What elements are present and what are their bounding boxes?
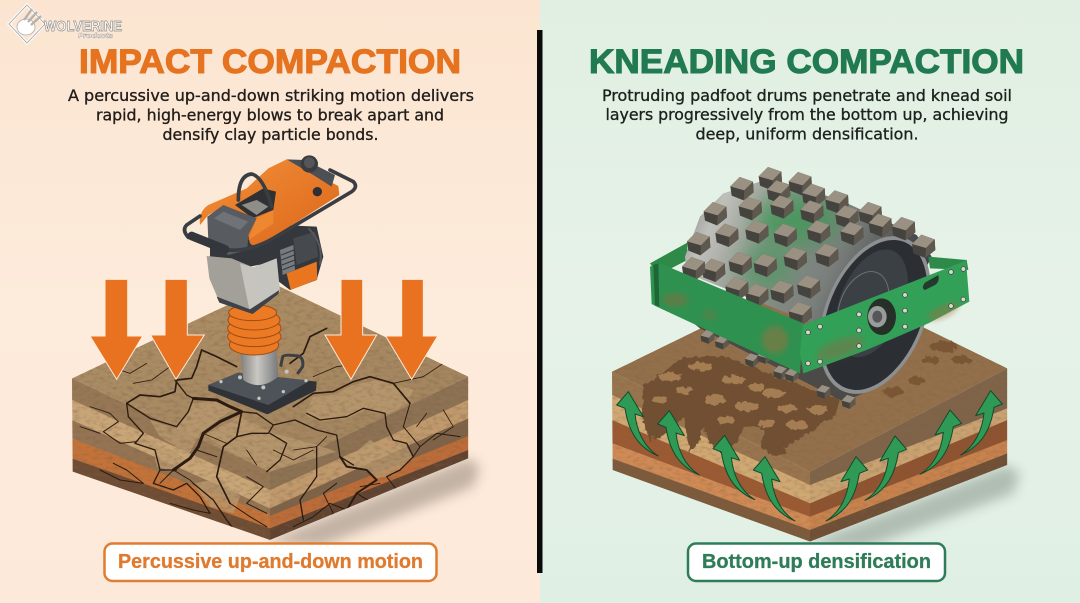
rammer handle (185, 170, 355, 250)
arrow 1 (90, 279, 143, 379)
lighter tan clay tiles (135, 380, 413, 513)
text block: impact description: rapid, high-energy blows to break apart and (96, 106, 444, 124)
side plate with hub (800, 261, 969, 373)
arrow up 5 (826, 457, 868, 521)
text block: kneading description: layers progressively from the bottom up, achieving (606, 105, 1008, 124)
text block: kneading description (602, 86, 1012, 144)
rammer base plate (208, 355, 317, 414)
drum green paint wash (740, 195, 840, 290)
arrow up 1 (617, 392, 658, 456)
arrows: downward impact (90, 279, 438, 379)
arrow up 8 (961, 391, 1002, 455)
rammer steel column (240, 350, 278, 385)
soil block: kneaded layers (612, 304, 1008, 542)
panel: kneading background (540, 0, 1080, 603)
illustration: cracked soil block with rammer (70, 155, 480, 547)
rammer engine fins (280, 228, 321, 290)
drum end disc (798, 220, 952, 410)
logo: Wolverine Products: Products (78, 31, 113, 40)
drum lower pads (683, 307, 863, 409)
center divider (537, 30, 542, 573)
front frame bar (650, 263, 803, 373)
text block: impact description: A percussive up-and-down striking motion delivers (68, 86, 474, 105)
arrow up 4 (753, 457, 795, 521)
soil block: cracked clay (70, 283, 470, 543)
logo: Wolverine Products (9, 5, 122, 43)
callout: bottom-up densification (688, 544, 945, 581)
callout: bottom-up densification: Bottom-up densification (702, 551, 931, 573)
arrow 4 (386, 279, 438, 379)
text block: kneading description: Protruding padfoot drums penetrate and knead soil (602, 86, 1012, 105)
arrows: upward kneading (617, 391, 1002, 521)
heading: impact compaction: IMPACT COMPACTION (79, 43, 461, 81)
callout: percussive motion (104, 544, 436, 581)
text block: impact description: densify clay particle bonds. (162, 125, 378, 144)
text block: kneading description: deep, uniform densification. (696, 124, 918, 144)
arrow up 7 (920, 410, 962, 474)
arrow up 3 (713, 435, 755, 500)
rear frame rail (650, 243, 687, 275)
drum body (685, 178, 932, 333)
rammer orange bellows (228, 305, 281, 355)
arrow 3 (325, 279, 377, 379)
text block: impact description (68, 86, 474, 144)
drum pad feet (682, 167, 935, 325)
rammer orange tank (200, 155, 339, 255)
illustration: kneaded soil block with padfoot drum (610, 167, 1020, 550)
arrow up 6 (865, 436, 907, 500)
icon: rammer machine (185, 155, 355, 414)
icon: padfoot drum roller (650, 167, 969, 410)
heading: kneading compaction: KNEADING COMPACTION (589, 43, 1024, 81)
logo: Wolverine Products: WOLVERINE (44, 18, 122, 35)
arrow 2 (151, 279, 204, 379)
rammer dark inner body (210, 223, 323, 290)
cracks (80, 328, 460, 533)
churned soil clumps (642, 341, 972, 457)
right frame rail (928, 257, 968, 270)
arrow up 2 (658, 411, 699, 475)
rammer grey housing (207, 256, 280, 314)
panel: impact background (0, 0, 540, 603)
callout: percussive motion: Percussive up-and-down motion (118, 551, 423, 573)
